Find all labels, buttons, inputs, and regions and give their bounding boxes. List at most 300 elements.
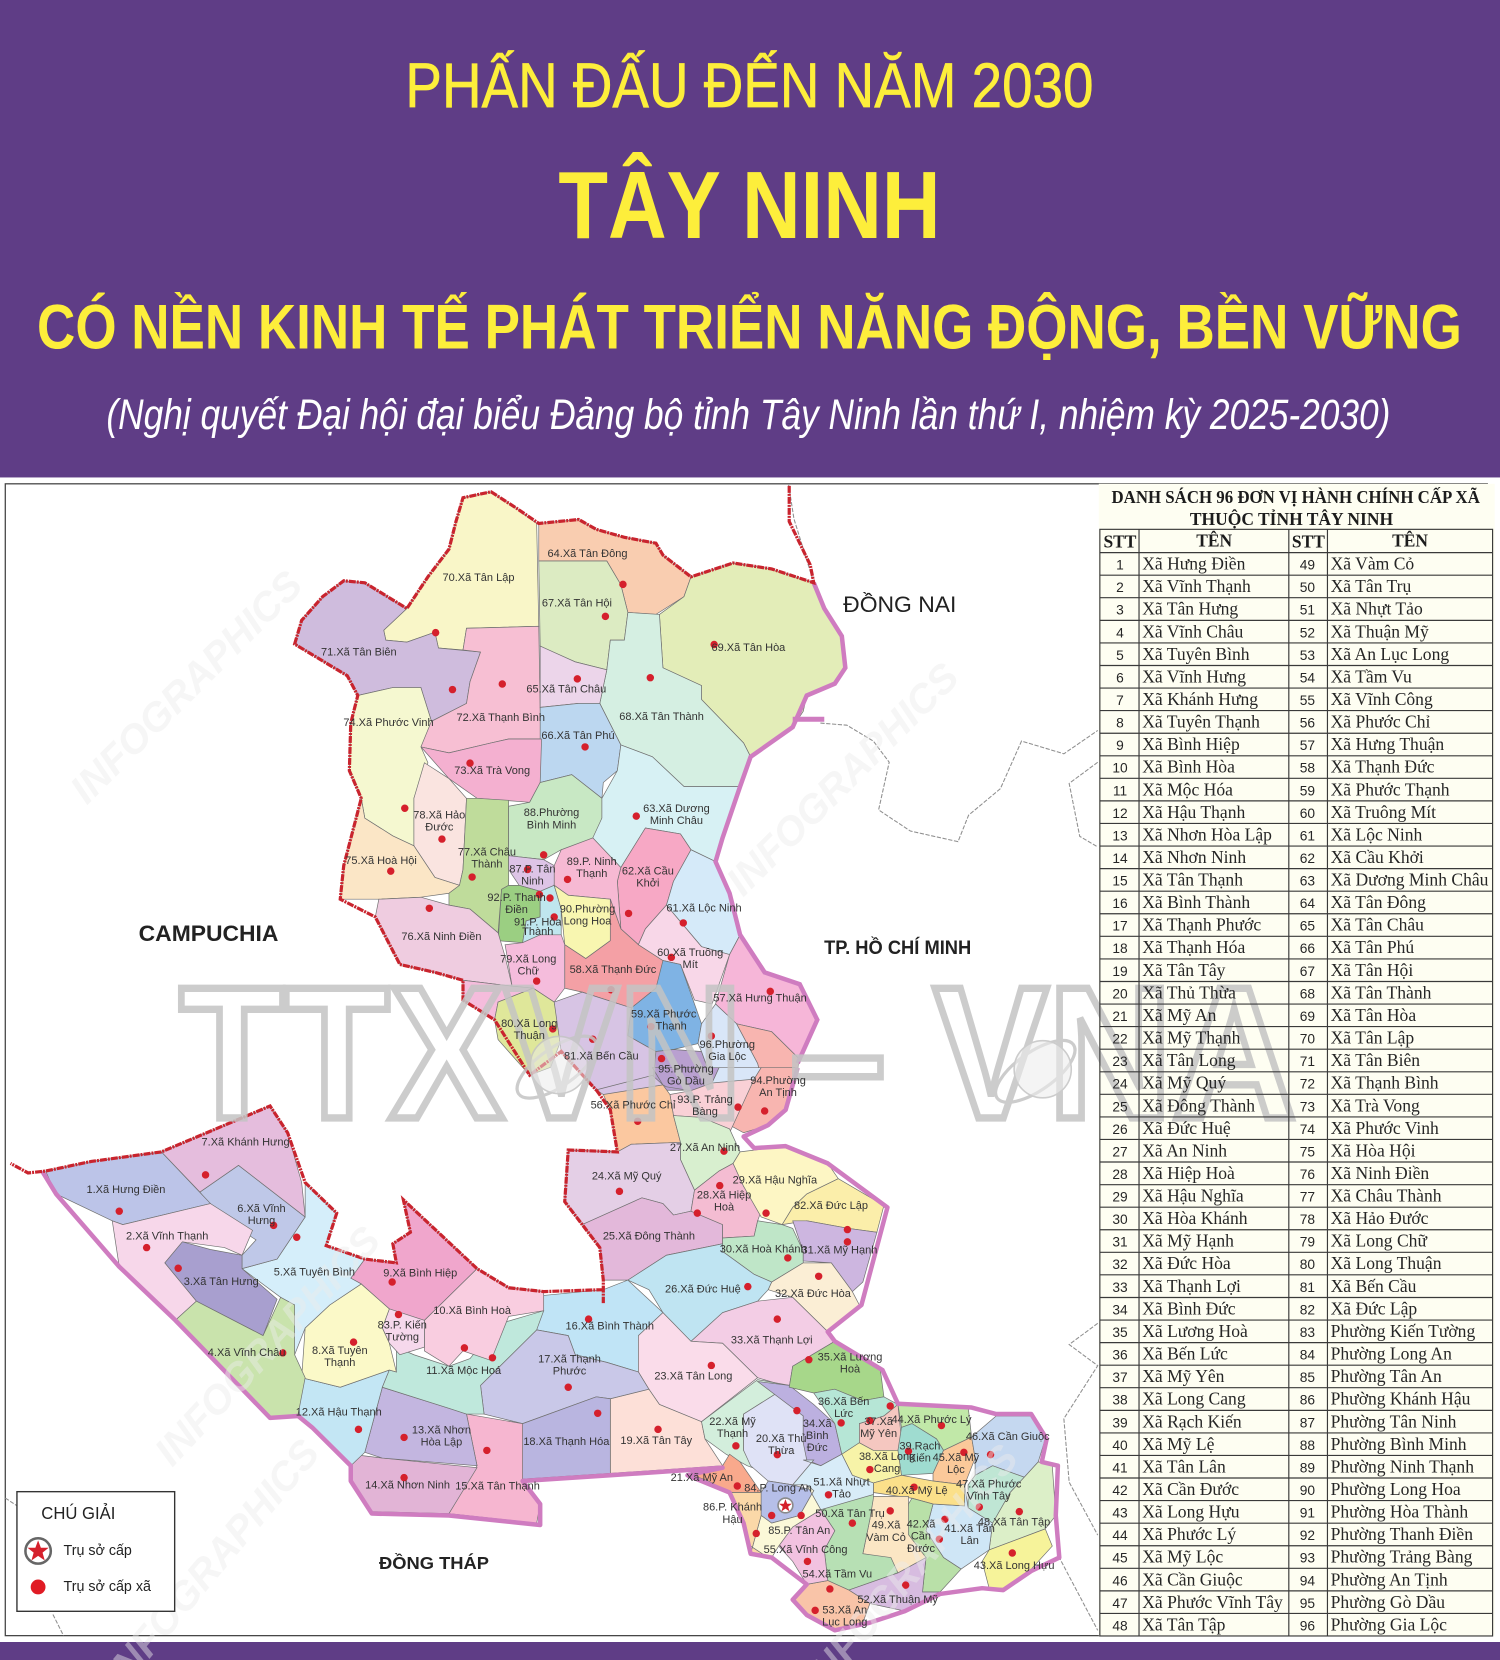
table rows: 37 xyxy=(1112,1370,1128,1385)
table rows: Phường Hòa Thành xyxy=(1331,1502,1468,1522)
commune labels: 49.Xã xyxy=(872,1520,900,1532)
table rows: 91 xyxy=(1300,1506,1315,1521)
commune labels: Gia Lộc xyxy=(708,1051,747,1063)
commune 53 xyxy=(793,1581,870,1630)
table rows: Xã Tân Hội xyxy=(1331,960,1413,980)
table rows: Xã Tầm Vu xyxy=(1331,666,1412,686)
table rows: Xã Hưng Điền xyxy=(1142,554,1246,574)
commune 55 xyxy=(779,1510,835,1584)
commune 49 xyxy=(863,1496,926,1573)
commune 87 xyxy=(509,856,554,891)
table background xyxy=(1099,484,1495,1636)
table rows: 16 xyxy=(1112,896,1128,911)
commune labels: 1.Xã Hưng Điền xyxy=(87,1184,165,1196)
legend star icon xyxy=(25,1538,51,1564)
table rows: Xã An Ninh xyxy=(1142,1140,1227,1160)
commune 95 xyxy=(652,1049,716,1090)
commune labels: 57.Xã Hưng Thuận xyxy=(713,993,807,1005)
table rows: 83 xyxy=(1300,1325,1315,1340)
commune labels: 76.Xã Ninh Điền xyxy=(401,931,481,943)
commune labels: 46.Xã Cần Giuộc xyxy=(966,1431,1050,1443)
commune labels: 5.Xã Tuyên Bình xyxy=(274,1267,355,1279)
table rows: Xã Tân Hòa xyxy=(1331,1005,1416,1025)
table rows: Phường Long An xyxy=(1331,1344,1452,1364)
commune labels: 79.Xã Long xyxy=(500,953,556,965)
table rows: Xã Vĩnh Hưng xyxy=(1142,666,1246,686)
commune labels: 71.Xã Tân Biên xyxy=(321,646,397,658)
table rows: 12 xyxy=(1112,806,1128,821)
commune labels: Kiến xyxy=(909,1452,931,1464)
table rows: Xã Lộc Ninh xyxy=(1331,824,1423,844)
commune labels: 86.P. Khánh xyxy=(703,1502,762,1514)
commune 40 xyxy=(873,1475,965,1506)
commune 20 xyxy=(744,1385,814,1485)
table rows: 39 xyxy=(1112,1415,1128,1430)
commune 75 xyxy=(340,798,459,899)
commune labels: Đước xyxy=(907,1543,935,1555)
table rows: 8 xyxy=(1116,716,1124,731)
table rows: 48 xyxy=(1112,1618,1128,1633)
table grid xyxy=(1100,529,1493,1636)
table rows: Xã Ninh Điền xyxy=(1331,1163,1429,1183)
table header row: STT xyxy=(1292,531,1325,551)
commune labels: 47.Xã Phước xyxy=(956,1478,1021,1490)
commune 96 xyxy=(698,1004,765,1090)
commune 14 xyxy=(351,1454,477,1514)
commune labels: 88.Phường xyxy=(524,807,579,819)
commune labels: 93.P. Trảng xyxy=(677,1094,733,1106)
commune labels: Ninh xyxy=(521,875,544,887)
table rows: Xã Thạnh Phước xyxy=(1142,915,1261,935)
table rows: Xã Tân Châu xyxy=(1331,915,1424,935)
commune 71 xyxy=(295,581,481,721)
table rows: Xã Mỹ Lộc xyxy=(1142,1547,1223,1567)
commune labels: 38.Xã Long xyxy=(859,1451,915,1463)
commune 90 xyxy=(554,885,610,959)
table rows: 44 xyxy=(1112,1528,1128,1543)
table rows: Xã Vĩnh Châu xyxy=(1142,621,1244,641)
label Campuchia: CAMPUCHIA xyxy=(139,921,278,946)
table rows: Phường Bình Minh xyxy=(1331,1434,1467,1454)
table rows: Xã Tân Lân xyxy=(1142,1456,1226,1476)
legend title: CHÚ GIẢI xyxy=(41,1502,115,1523)
table rows: 86 xyxy=(1300,1393,1315,1408)
table rows: Phường Long Hoa xyxy=(1331,1479,1461,1499)
commune labels: 36.Xã Bến xyxy=(818,1396,869,1408)
table rows: 50 xyxy=(1300,580,1315,595)
commune labels: 60.Xã Truông xyxy=(657,947,723,959)
table rows: 90 xyxy=(1300,1483,1315,1498)
commune 51 xyxy=(793,1454,873,1510)
table rows: Phường Kiến Tường xyxy=(1331,1321,1475,1341)
table rows: 58 xyxy=(1300,761,1315,776)
table rows: Phường Khánh Hậu xyxy=(1331,1389,1471,1409)
commune 17 xyxy=(481,1330,649,1424)
commune labels: 20.Xã Thủ xyxy=(756,1433,807,1445)
commune dots south xyxy=(116,1103,1023,1614)
commune 5 xyxy=(242,1183,365,1355)
commune labels: 62.Xã Cầu xyxy=(622,865,674,877)
river inlet xyxy=(793,717,824,722)
red border north xyxy=(295,486,814,1090)
table rows: 28 xyxy=(1112,1167,1128,1182)
commune labels: 54.Xã Tầm Vu xyxy=(802,1568,872,1580)
commune labels: Khởi xyxy=(636,878,659,890)
table rows: Xã Tân Đông xyxy=(1331,892,1426,912)
commune labels: 34.Xã xyxy=(803,1418,832,1430)
table rows: Xã Bình Hiệp xyxy=(1142,734,1240,754)
commune 70 xyxy=(384,492,539,650)
table rows: 34 xyxy=(1112,1302,1128,1317)
table rows: 73 xyxy=(1300,1099,1315,1114)
table rows: 41 xyxy=(1112,1460,1128,1475)
commune 83 xyxy=(382,1309,424,1355)
table rows xyxy=(1112,554,1489,1634)
table rows: 42 xyxy=(1112,1483,1128,1498)
table rows: 6 xyxy=(1116,670,1124,685)
commune 12 xyxy=(298,1370,389,1466)
table rows: Xã Tân Biên xyxy=(1331,1050,1420,1070)
table rows: 47 xyxy=(1112,1596,1128,1611)
commune 91 xyxy=(523,885,561,943)
commune labels: 18.Xã Thạnh Hóa xyxy=(523,1436,610,1448)
commune 60 xyxy=(638,905,730,1004)
map south part xyxy=(11,1068,1059,1630)
commune 47 xyxy=(968,1466,1024,1523)
pink border south xyxy=(42,1068,1059,1630)
commune labels: 43.Xã Long Hựu xyxy=(974,1560,1054,1572)
commune labels: 24.Xã Mỹ Quý xyxy=(592,1170,662,1182)
table rows: Xã Châu Thành xyxy=(1331,1186,1442,1206)
commune labels: Đước xyxy=(425,821,454,833)
red border south xyxy=(11,1090,617,1303)
table rows: Xã Hòa Hội xyxy=(1331,1140,1416,1160)
map north part xyxy=(295,486,845,1090)
commune 89 xyxy=(554,838,621,929)
table rows: 18 xyxy=(1112,941,1128,956)
commune dots north xyxy=(387,581,774,1062)
label Đồng Nai: ĐỒNG NAI xyxy=(843,592,956,617)
table rows: 54 xyxy=(1300,670,1315,685)
commune labels: Thuận xyxy=(514,1030,545,1042)
table rows: Xã Vĩnh Thạnh xyxy=(1142,576,1251,596)
diagonal INFOGRAPHICS watermarks: INFOGRAPHICS xyxy=(61,562,311,812)
table rows: 24 xyxy=(1112,1077,1128,1092)
table rows: 56 xyxy=(1300,716,1315,731)
pink border north xyxy=(716,583,845,1063)
commune 82 xyxy=(782,1179,884,1232)
commune labels: 80.Xã Long xyxy=(501,1018,557,1030)
table rows: 17 xyxy=(1112,919,1128,934)
commune labels: 67.Xã Tân Hội xyxy=(542,598,612,610)
commune labels: 21.Xã Mỹ An xyxy=(671,1472,733,1484)
table rows: Xã Mộc Hóa xyxy=(1142,779,1233,799)
commune labels: 85.P. Tân An xyxy=(768,1525,830,1537)
commune 93 xyxy=(670,1079,754,1133)
table rows: Xã Thạnh Đức xyxy=(1331,757,1435,777)
commune 8 xyxy=(302,1284,396,1387)
table rows: Xã Trà Vong xyxy=(1331,1095,1420,1115)
table rows: Xã Tân Phú xyxy=(1331,937,1414,957)
table rows: 71 xyxy=(1300,1054,1315,1069)
commune labels: Cang xyxy=(874,1463,900,1475)
commune 58 xyxy=(565,899,663,1008)
table rows: 52 xyxy=(1300,625,1315,640)
commune labels: Gò Dầu xyxy=(667,1076,705,1088)
table rows: Xã Bình Hòa xyxy=(1142,757,1235,777)
table rows: Xã Tân Tập xyxy=(1142,1614,1226,1634)
table rows: 80 xyxy=(1300,1257,1315,1272)
table rows: Xã Hảo Đước xyxy=(1331,1208,1429,1228)
commune labels: Tảo xyxy=(832,1488,851,1500)
table rows: Xã Vĩnh Công xyxy=(1331,689,1433,709)
commune 10 xyxy=(424,1269,544,1366)
commune labels: 2.Xã Vĩnh Thạnh xyxy=(126,1231,208,1243)
table rows: 4 xyxy=(1116,625,1124,640)
commune labels: Lộc xyxy=(947,1464,965,1476)
commune labels: 42.Xã xyxy=(907,1519,935,1531)
legend star text: Trụ sở cấp xyxy=(64,1543,132,1559)
table rows: Xã Tuyên Bình xyxy=(1142,644,1250,664)
commune labels: 77.Xã Châu xyxy=(458,846,516,858)
table rows: 33 xyxy=(1112,1280,1128,1295)
commune labels: Thạnh xyxy=(717,1428,748,1440)
table rows: Xã Nhơn Ninh xyxy=(1142,847,1246,867)
commune labels: 48.Xã Tân Tập xyxy=(978,1517,1050,1529)
commune 19 xyxy=(610,1389,723,1473)
commune labels: 44.Xã Phước Lý xyxy=(892,1414,972,1426)
commune 94 south xyxy=(730,1068,796,1133)
diagonal INFOGRAPHICS watermarks xyxy=(61,562,1027,1660)
table rows: Xã Mỹ Yên xyxy=(1142,1366,1225,1386)
commune labels: 16.Xã Bình Thành xyxy=(565,1321,654,1333)
table rows: 85 xyxy=(1300,1370,1315,1385)
commune 95 south xyxy=(652,1068,719,1091)
table rows: Xã Tân Trụ xyxy=(1331,576,1412,596)
commune labels: 90.Phường xyxy=(560,904,615,916)
commune 96 south xyxy=(712,1068,761,1083)
commune 86 xyxy=(730,1493,768,1558)
commune labels: 78.Xã Hảo xyxy=(413,809,465,821)
commune labels: 6.Xã Vĩnh xyxy=(237,1203,286,1215)
commune labels: 19.Xã Tân Tây xyxy=(620,1435,693,1447)
commune 36 xyxy=(814,1389,898,1454)
commune labels: Hoà xyxy=(714,1201,735,1213)
commune 76 xyxy=(375,897,512,986)
commune labels: 25.Xã Đông Thành xyxy=(603,1231,695,1243)
table rows: Xã Bình Đức xyxy=(1142,1298,1236,1318)
diagonal INFOGRAPHICS watermarks: INFOGRAPHICS xyxy=(146,1218,389,1474)
table rows: Xã Thạnh Bình xyxy=(1331,1073,1439,1093)
table rows: Xã Cần Giuộc xyxy=(1142,1569,1243,1589)
table rows: 95 xyxy=(1300,1596,1315,1611)
table rows: 61 xyxy=(1300,828,1315,843)
commune labels: 39.Rạch xyxy=(899,1440,940,1452)
table rows: 49 xyxy=(1300,558,1315,573)
commune labels: 59.Xã Phước xyxy=(631,1008,696,1020)
commune 13 xyxy=(365,1387,477,1466)
table rows: 29 xyxy=(1112,1190,1128,1205)
commune labels: 33.Xã Thạnh Lợi xyxy=(731,1334,813,1346)
table rows: Xã Long Cang xyxy=(1142,1389,1246,1409)
commune labels: Thạnh xyxy=(324,1357,355,1369)
commune 7 xyxy=(161,1106,305,1217)
commune labels: 15.Xã Tân Thạnh xyxy=(455,1481,540,1493)
commune 44 xyxy=(898,1404,972,1450)
table rows: Phường Trảng Bàng xyxy=(1331,1547,1473,1567)
table rows: 65 xyxy=(1300,919,1315,934)
table rows: 51 xyxy=(1300,603,1315,618)
commune 46 xyxy=(972,1416,1045,1477)
commune 62 xyxy=(617,828,691,945)
title main: TÂY NINH xyxy=(558,152,941,259)
commune 67 xyxy=(539,561,628,670)
table rows: Xã Thuận Mỹ xyxy=(1331,621,1429,641)
table rows: 74 xyxy=(1300,1122,1315,1137)
table rows: 11 xyxy=(1113,783,1127,798)
commune labels: Hậu xyxy=(722,1514,743,1526)
table title: THUỘC TỈNH TÂY NINH xyxy=(1190,509,1393,529)
commune labels: Thành xyxy=(471,858,503,870)
commune labels: 92.P. Thanh xyxy=(487,892,546,904)
table rows: Xã Nhựt Tảo xyxy=(1331,599,1423,619)
commune 37 xyxy=(859,1404,901,1450)
commune labels: Bàng xyxy=(692,1106,718,1118)
table rows: 22 xyxy=(1112,1032,1128,1047)
commune labels: 75.Xã Hoà Hội xyxy=(345,855,417,867)
commune labels: 74.Xã Phước Vinh xyxy=(343,717,434,729)
commune 23 xyxy=(638,1313,758,1422)
commune 73 xyxy=(421,739,542,802)
commune 72 xyxy=(421,626,542,753)
commune 92 xyxy=(498,885,540,943)
table rows: 55 xyxy=(1300,693,1315,708)
commune labels: 55.Xã Vĩnh Công xyxy=(764,1544,847,1556)
table rows: 92 xyxy=(1300,1528,1315,1543)
commune labels: 14.Xã Nhơn Ninh xyxy=(365,1479,450,1491)
table rows: 13 xyxy=(1112,828,1128,843)
commune labels: Tường xyxy=(385,1332,419,1344)
table rows: Xã Rạch Kiến xyxy=(1142,1411,1242,1431)
legend xyxy=(17,1492,175,1611)
commune labels: 22.Xã Mỹ xyxy=(709,1416,756,1428)
commune labels: 73.Xã Trà Vong xyxy=(454,765,530,777)
table rows: 94 xyxy=(1300,1573,1315,1588)
table rows: 43 xyxy=(1112,1506,1128,1521)
table rows: 45 xyxy=(1112,1551,1128,1566)
table rows: 38 xyxy=(1112,1393,1128,1408)
table rows: Xã Cầu Khởi xyxy=(1331,847,1424,867)
table rows: Xã Phước Chỉ xyxy=(1331,712,1431,732)
table rows: Xã Đức Huệ xyxy=(1142,1118,1231,1138)
commune labels: Đức xyxy=(807,1442,828,1454)
commune labels: Lân xyxy=(960,1535,979,1547)
commune labels: Long Hoa xyxy=(564,916,612,928)
table rows: Xã Hậu Nghĩa xyxy=(1142,1186,1244,1206)
label TP. Hồ Chí Minh: TP. HỒ CHÍ MINH xyxy=(824,937,971,959)
commune labels: Chữ xyxy=(518,965,540,977)
table rows: 84 xyxy=(1300,1348,1315,1363)
table rows: 72 xyxy=(1300,1077,1315,1092)
list table xyxy=(1100,487,1493,1636)
table rows: 53 xyxy=(1300,648,1315,663)
table rows: Xã Thạnh Hóa xyxy=(1142,937,1245,957)
table header row: TÊN xyxy=(1196,530,1233,550)
commune labels: 83.P. Kiến xyxy=(378,1320,427,1332)
commune 52 xyxy=(849,1558,940,1611)
table rows: 3 xyxy=(1116,603,1124,618)
large TTXVN watermark: TTXVN – VNA xyxy=(179,947,1296,1158)
commune 28 xyxy=(691,1163,761,1238)
commune 16 xyxy=(537,1280,663,1372)
commune 78 xyxy=(414,763,467,885)
commune labels: 64.Xã Tân Đông xyxy=(548,548,627,560)
table rows: Xã Long Hựu xyxy=(1142,1502,1240,1522)
table rows: 2 xyxy=(1116,580,1124,595)
table rows: 20 xyxy=(1112,986,1128,1001)
commune labels: 53.Xã An xyxy=(822,1604,867,1616)
commune labels: Vàm Cỏ xyxy=(866,1532,906,1544)
commune labels: 26.Xã Đức Huệ xyxy=(665,1284,741,1296)
commune 50 xyxy=(821,1493,898,1590)
table rows: 7 xyxy=(1116,693,1124,708)
table rows: Xã Phước Vĩnh Tây xyxy=(1142,1592,1283,1612)
commune labels: 8.Xã Tuyên xyxy=(312,1345,368,1357)
commune labels: Bình Minh xyxy=(527,819,576,831)
table rows: Xã Tân Long xyxy=(1142,1050,1236,1070)
table rows: 40 xyxy=(1112,1438,1128,1453)
table rows: Xã Đông Thành xyxy=(1142,1095,1255,1115)
table rows: 35 xyxy=(1112,1325,1128,1340)
table rows: Xã Đức Hòa xyxy=(1142,1253,1231,1273)
table rows: Xã Dương Minh Châu xyxy=(1331,870,1489,890)
commune 4 xyxy=(175,1297,305,1418)
commune labels: Vĩnh Tây xyxy=(967,1491,1011,1503)
commune labels: 35.Xã Lương xyxy=(818,1351,882,1363)
commune 31 xyxy=(793,1221,877,1292)
commune labels: Lức xyxy=(834,1408,854,1420)
legend dot text: Trụ sở cấp xã xyxy=(64,1579,151,1595)
table rows: Xã Thạnh Lợi xyxy=(1142,1276,1241,1296)
commune 26 xyxy=(628,1244,772,1341)
commune 81 south xyxy=(596,1075,663,1094)
commune labels: 70.Xã Tân Lập xyxy=(442,572,514,584)
commune 64 xyxy=(539,519,691,614)
commune 68 xyxy=(600,612,751,786)
table rows: 75 xyxy=(1300,1144,1315,1159)
table header row xyxy=(1103,530,1428,551)
commune 63 xyxy=(593,745,740,868)
commune 45 xyxy=(933,1437,975,1485)
commune labels: 28.Xã Hiệp xyxy=(697,1189,751,1201)
commune labels: 10.Xã Bình Hoà xyxy=(433,1305,512,1317)
commune 6 xyxy=(200,1165,305,1269)
commune labels: 29.Xã Hậu Nghĩa xyxy=(733,1175,818,1187)
table rows: Xã Mỹ Hạnh xyxy=(1142,1231,1234,1251)
commune 34 xyxy=(758,1382,842,1466)
commune 24 xyxy=(565,1142,695,1225)
commune labels: Bình xyxy=(806,1430,829,1442)
table rows: Xã Hòa Khánh xyxy=(1142,1208,1248,1228)
table rows: Xã Tân Thạnh xyxy=(1142,870,1243,890)
commune labels: 23.Xã Tân Long xyxy=(654,1370,732,1382)
table rows: 19 xyxy=(1112,964,1128,979)
table rows: 77 xyxy=(1300,1190,1315,1205)
commune labels: Hoà xyxy=(840,1363,861,1375)
label Đồng Tháp: ĐỒNG THÁP xyxy=(379,1552,489,1573)
commune 11 xyxy=(382,1311,544,1414)
table rows: 1 xyxy=(1116,558,1124,573)
